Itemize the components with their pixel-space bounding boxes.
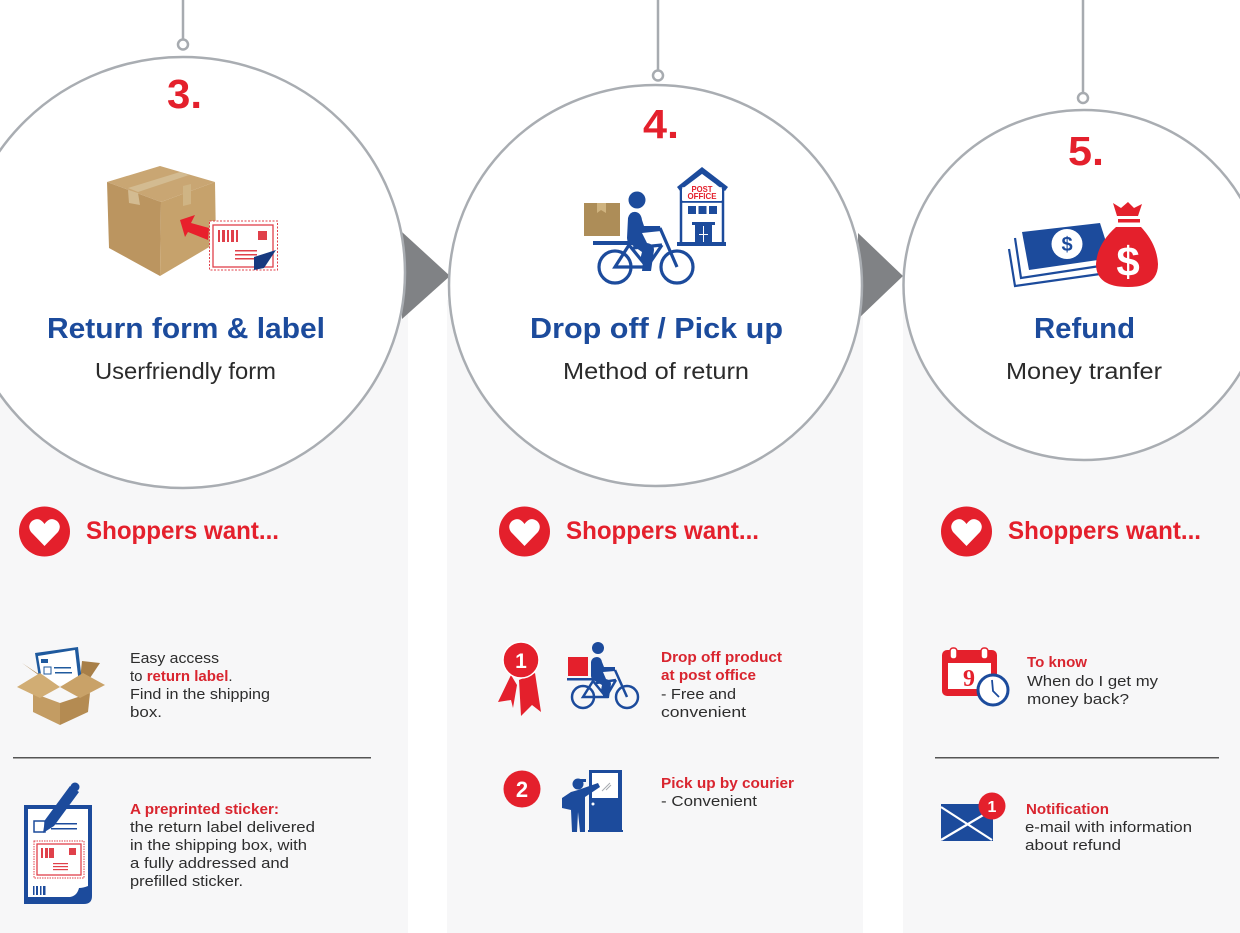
text: drop off product: at post office (661, 667, 756, 684)
divider: column 3 (13, 757, 371, 758)
circle: step 4 (449, 85, 862, 486)
text: to know: money back? (1027, 691, 1129, 708)
text: pick up by courier: - Convenient (661, 793, 758, 810)
subheading: refund: Money tranfer (1006, 358, 1162, 384)
step number 4: 4. (643, 101, 679, 147)
icon: cyclist and post office: OFFICE (688, 191, 717, 201)
hanger: step 4 (653, 0, 663, 80)
panel: column 4 background (447, 300, 863, 933)
text: drop off product: - Free and (661, 686, 736, 703)
text: notification: about refund (1025, 837, 1121, 854)
text: drop off product: Drop off product (661, 649, 782, 666)
heading: refund: Refund (1034, 313, 1135, 345)
icon: banknotes and money bag: $ (1061, 234, 1073, 256)
text: preprinted sticker: prefilled sticker. (130, 873, 243, 890)
text: pick up by courier: Pick up by courier (661, 775, 794, 792)
shoppers want: column 3 (19, 506, 279, 556)
text: to know: When do I get my (1027, 673, 1159, 690)
text: preprinted sticker: a fully addressed and (130, 855, 289, 872)
icon: cyclist with red box (567, 642, 638, 708)
icon: courier at door (562, 770, 623, 832)
step number 3: 3. (167, 71, 202, 117)
arrow: step 4 to 5 (858, 233, 903, 319)
text: drop off product: convenient (661, 704, 747, 721)
icon: envelope with notification: 1 (988, 799, 997, 816)
text: notification: Notification (1026, 801, 1109, 818)
shoppers want: column 5: Shoppers want... (1008, 517, 1201, 545)
icon: cyclist and post office: POST (692, 184, 713, 194)
heading: drop off: Drop off / Pick up (530, 313, 783, 345)
icon: open box with label (17, 647, 105, 725)
text: preprinted sticker (130, 801, 315, 890)
text: drop off product (661, 649, 782, 721)
text: to know (1027, 654, 1159, 708)
hanger: step 5 (1078, 0, 1088, 103)
text: easy access: to return label. (130, 668, 233, 685)
icon: calendar and clock: 9 (963, 666, 975, 692)
badge: number 2 (504, 770, 540, 808)
text: to know: To know (1027, 654, 1087, 671)
badge: number 2: 2 (516, 777, 528, 802)
icon: banknotes and money bag (1009, 202, 1158, 287)
icon: envelope with notification (941, 792, 1006, 841)
text: easy access: Easy access (130, 650, 219, 667)
text: notification: e-mail with information (1025, 819, 1192, 836)
panel: column 3 background (0, 300, 408, 933)
text: easy access (130, 650, 270, 721)
text: preprinted sticker: the return label delivered (130, 819, 315, 836)
icon: ribbon number 1: 1 (515, 650, 527, 673)
text: pick up by courier (661, 775, 794, 810)
icon: banknotes and money bag: $ (1116, 238, 1140, 285)
icon: ribbon number 1 (498, 642, 541, 716)
text: preprinted sticker: in the shipping box, with (130, 837, 307, 854)
subheading: return form: Userfriendly form (95, 358, 276, 384)
circle: step 5 (904, 110, 1240, 460)
shoppers want: column 5 (941, 506, 1201, 556)
text: preprinted sticker: A preprinted sticker: (130, 801, 279, 818)
subheading: drop off: Method of return (563, 358, 749, 384)
text: notification (1025, 801, 1192, 854)
shoppers want: column 4 (499, 506, 759, 556)
divider: column 5 (935, 757, 1219, 758)
arrow: step 3 to 4 (402, 232, 450, 319)
icon: cardboard box with label (107, 166, 278, 276)
icon: cyclist and post office (584, 167, 728, 283)
text: easy access: box. (130, 704, 162, 721)
text: easy access: Find in the shipping (130, 686, 270, 703)
step number 5: 5. (1068, 128, 1104, 174)
icon: calendar and clock (942, 648, 1008, 705)
panel: column 5 background (903, 300, 1240, 933)
circle: step 3 (0, 57, 405, 488)
heading: return form: Return form & label (47, 313, 325, 345)
hanger: step 3 (178, 0, 188, 50)
icon: form with pen (24, 782, 92, 904)
shoppers want: column 3: Shoppers want... (86, 517, 279, 545)
shoppers want: column 4: Shoppers want... (566, 517, 759, 545)
